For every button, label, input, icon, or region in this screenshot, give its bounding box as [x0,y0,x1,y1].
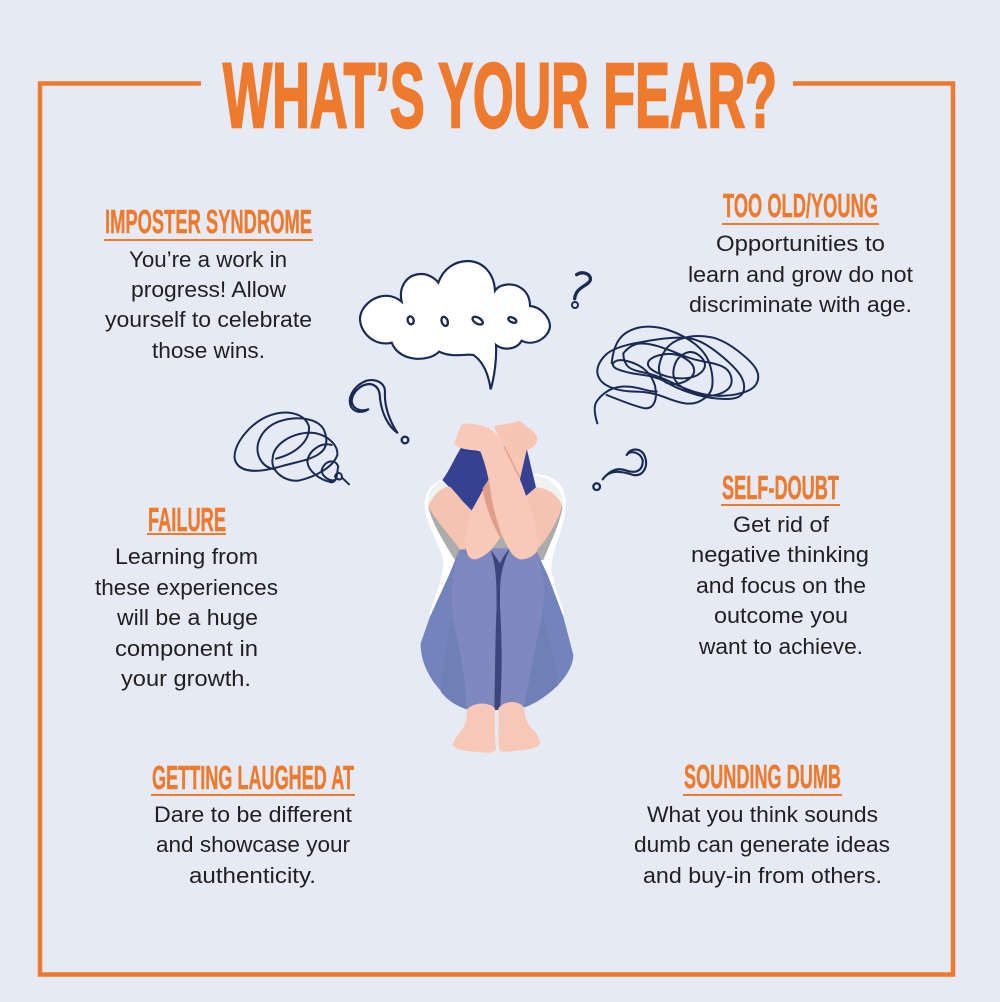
panel: failure [95,502,278,691]
text: getting laughed at advice: authenticity. [189,863,316,888]
text: imposter syndrome advice [105,247,312,363]
icon: question mark lower right [593,450,646,490]
text: failure advice: will be a huge [116,605,258,630]
panel: sounding dumb [634,759,890,888]
speech cloud with dots [360,261,550,389]
heading: failure [147,502,226,539]
text: too old/young advice: Opportunities to [716,231,885,256]
text: getting laughed at advice [154,802,353,888]
heading: failure: FAILURE [148,502,226,539]
panel: self-doubt [691,470,869,659]
text: self-doubt advice: want to achieve. [698,634,863,659]
text: failure advice: your growth. [121,666,251,691]
text: too old/young advice: learn and grow do not [688,262,914,287]
icon: question mark top right [572,273,590,308]
heading: too old/young: TOO OLD/YOUNG [723,188,878,225]
text: failure advice: Learning from [115,544,258,569]
heading: self-doubt: SELF-DOUBT [722,470,839,507]
heading: self-doubt [721,470,840,507]
text: imposter syndrome advice: You’re a work in [129,247,287,272]
text: self-doubt advice: and focus on the [696,573,866,598]
text: self-doubt advice: Get rid of [733,512,830,537]
text: sounding dumb advice: dumb can generate ideas [634,832,890,857]
text: failure advice [95,544,278,691]
text: getting laughed at advice: Dare to be different [154,802,353,827]
text: sounding dumb advice: What you think sounds [647,802,878,827]
text: too old/young advice: discriminate with age. [689,292,912,317]
text: too old/young advice [688,231,914,317]
panel: imposter syndrome [104,204,313,363]
icon: scribble right [595,327,758,423]
text: imposter syndrome advice: those wins. [152,338,265,363]
panel: too old/young [688,188,914,317]
text: imposter syndrome advice: progress! Allow [131,277,287,302]
text: failure advice: component in [115,636,258,661]
text: self-doubt advice: negative thinking [691,542,869,567]
heading: sounding dumb: SOUNDING DUMB [684,759,841,796]
heading: getting laughed at: GETTING LAUGHED AT [152,760,354,797]
icon: question mark left [350,380,408,443]
text: sounding dumb advice: and buy-in from others. [643,863,882,888]
illustration: seated person hugging knees [421,421,573,753]
text: self-doubt advice [691,512,869,659]
text: failure advice: these experiences [95,575,278,600]
panel: getting laughed at [151,760,355,888]
text: getting laughed at advice: and showcase your [156,832,350,857]
icon: scribble left [235,413,349,484]
text: sounding dumb advice [634,802,890,888]
heading: imposter syndrome: IMPOSTER SYNDROME [105,204,312,241]
text: imposter syndrome advice: yourself to celebrate [105,307,312,332]
text: self-doubt advice: outcome you [714,603,848,628]
